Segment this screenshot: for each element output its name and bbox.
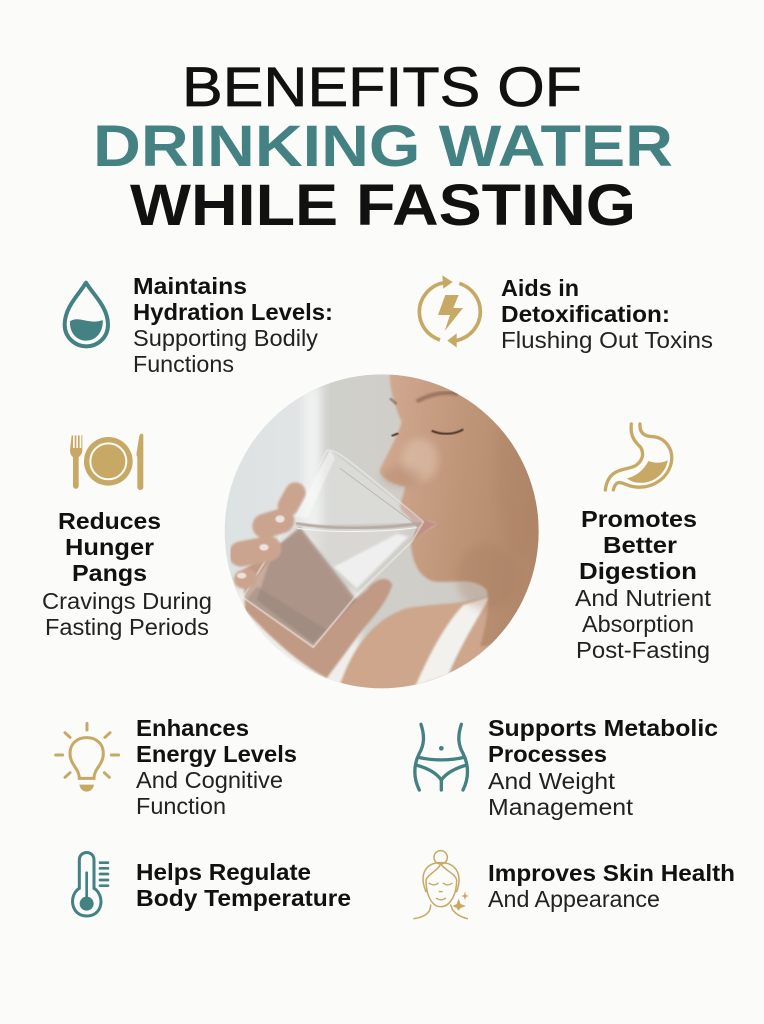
panel: hunger: [42, 434, 212, 640]
detoxification text: [501, 275, 713, 353]
metabolism text: Supports Metabolic: [488, 715, 718, 741]
digestion text: Digestion: [579, 558, 697, 584]
panel: energy: [56, 715, 297, 819]
panel: temperature: [73, 852, 351, 916]
digestion text: [575, 506, 712, 663]
panel: digestion: [575, 424, 712, 663]
hydration text: Maintains: [133, 273, 247, 299]
hydration text: Supporting Bodily: [133, 325, 318, 351]
finger nails: [237, 515, 285, 579]
icon: thermometer: [73, 852, 108, 916]
temperature text: [136, 859, 351, 911]
icon: waist: [415, 724, 467, 790]
icon: water drop: [65, 283, 108, 346]
energy text: [136, 715, 297, 819]
title: [93, 55, 673, 238]
detoxification text: Detoxification:: [501, 301, 670, 327]
face and neck: [379, 370, 553, 647]
metabolism text: Management: [488, 794, 634, 820]
hydration text: Functions: [133, 351, 234, 377]
panel: skin: [414, 851, 735, 919]
hunger text: Reduces: [58, 508, 161, 534]
infographic canvas: [43, 66, 734, 920]
icon: plate with fork and knife: [70, 434, 143, 490]
hunger text: Pangs: [72, 560, 147, 586]
panel: hydration: [65, 273, 333, 377]
digestion text: Absorption: [582, 611, 694, 637]
energy text: And Cognitive: [136, 767, 283, 793]
photo: woman drinking a glass of water: [224, 374, 539, 688]
eyebrow and eye: [417, 393, 458, 402]
energy text: Enhances: [136, 715, 249, 741]
skin text: [488, 860, 735, 912]
detoxification text: Flushing Out Toxins: [501, 327, 713, 353]
title: WHILE FASTING: [130, 173, 636, 238]
title: BENEFITS OF: [182, 55, 582, 118]
digestion text: Better: [603, 532, 677, 558]
shoulder: [340, 596, 523, 688]
skin text: Improves Skin Health: [488, 860, 735, 886]
hunger text: Fasting Periods: [45, 614, 209, 640]
icon: face with sparkles: [414, 851, 469, 919]
detoxification text: Aids in: [501, 275, 579, 301]
hunger text: Hunger: [65, 534, 154, 560]
icon: light bulb: [56, 723, 119, 792]
glass edges: [243, 450, 423, 647]
hydration text: [133, 273, 333, 377]
fingers: [241, 493, 295, 579]
digestion text: Post-Fasting: [576, 637, 710, 663]
metabolism text: [488, 715, 718, 820]
hydration text: Hydration Levels:: [133, 299, 333, 325]
panel: detoxification: [419, 275, 713, 353]
temperature text: Helps Regulate: [136, 859, 311, 885]
digestion text: And Nutrient: [575, 585, 712, 611]
hunger text: Cravings During: [42, 588, 212, 614]
energy text: Function: [136, 793, 226, 819]
glass upper body: [325, 452, 423, 524]
digestion text: Promotes: [581, 506, 697, 532]
panel: metabolism: [415, 715, 718, 820]
energy text: Energy Levels: [136, 741, 297, 767]
metabolism text: And Weight: [488, 768, 616, 794]
metabolism text: Processes: [488, 741, 607, 767]
title: DRINKING WATER: [93, 114, 673, 179]
hunger text: [42, 508, 212, 640]
glass water body: [243, 525, 422, 647]
skin text: And Appearance: [488, 886, 660, 912]
forearm and palm: [243, 530, 392, 678]
icon: cycle with lightning bolt: [419, 275, 480, 348]
temperature text: Body Temperature: [136, 885, 351, 911]
icon: stomach: [605, 424, 672, 490]
lips: [398, 505, 437, 542]
top strap: [415, 597, 490, 687]
